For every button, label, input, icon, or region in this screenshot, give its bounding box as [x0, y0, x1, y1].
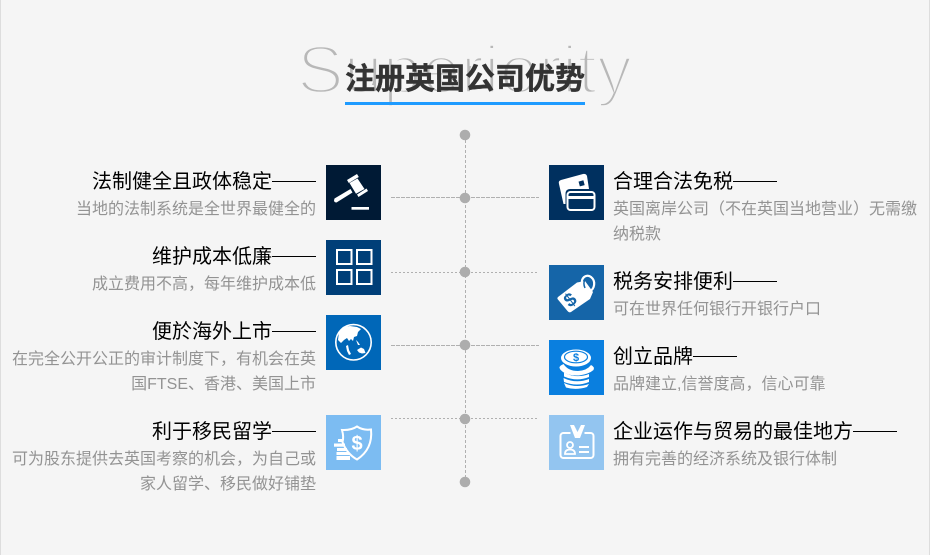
right item 2 text: 税务安排便利: [613, 271, 733, 293]
left item 3 text: 国FTSE、香港、美国上市: [131, 376, 316, 393]
left item 3 text: 便於海外上市: [152, 321, 272, 343]
left item 1 text: 法制健全且政体稳定: [92, 171, 272, 193]
icon: shield with coins: [326, 415, 381, 470]
right item 1 text: 合理合法免税: [613, 171, 733, 193]
right item 4 text: 拥有完善的经济系统及银行体制: [613, 451, 837, 468]
right item 2 text: [613, 271, 821, 318]
background word: Superiority: Superiority: [297, 32, 632, 108]
left item 2 text: 维护成本低廉: [152, 246, 272, 268]
icon: grid: [326, 240, 381, 295]
left item 2 text: [92, 246, 316, 293]
left item 3 text: [12, 320, 316, 393]
right item 4 text: [613, 420, 897, 468]
icon: coin stack: $: [573, 352, 579, 364]
icon: gavel: [326, 165, 381, 220]
icon: globe: [326, 315, 381, 370]
left item 4 text: 可为股东提供去英国考察的机会，为自己或: [12, 451, 316, 468]
left item 4 text: 家人留学、移民做好铺垫: [140, 476, 316, 493]
left item 1 text: 当地的法制系统是全世界最健全的: [76, 201, 316, 218]
right item 1 text: 纳税款: [613, 226, 661, 243]
icon: credit cards: [549, 165, 604, 220]
left item 1 text: [76, 170, 316, 218]
left item 4 text: [12, 420, 316, 493]
left item 4 text: 利于移民留学: [152, 421, 272, 443]
icon: coin stack: [549, 340, 604, 395]
right item 3 text: 创立品牌: [613, 346, 693, 368]
right item 4 text: 企业运作与贸易的最佳地方: [613, 421, 853, 443]
title: 注册英国公司优势: [345, 63, 585, 96]
right item 3 text: [613, 346, 825, 393]
icon: ID badge: [549, 415, 604, 470]
right item 1 text: 英国离岸公司（不在英国当地营业）无需缴: [613, 201, 917, 218]
left item 3 text: 在完全公开公正的审计制度下，有机会在英: [12, 351, 316, 368]
icon: price tag: [549, 265, 604, 320]
right item 2 text: 可在世界任何银行开银行户口: [613, 301, 821, 318]
icon: price tag: $: [560, 289, 582, 312]
timeline: [391, 130, 539, 488]
right item 1 text: [613, 171, 917, 243]
right item 3 text: 品牌建立,信誉度高，信心可靠: [613, 376, 825, 393]
left item 2 text: 成立费用不高，每年维护成本低: [92, 276, 316, 293]
icon: shield with coins: $: [351, 433, 363, 455]
